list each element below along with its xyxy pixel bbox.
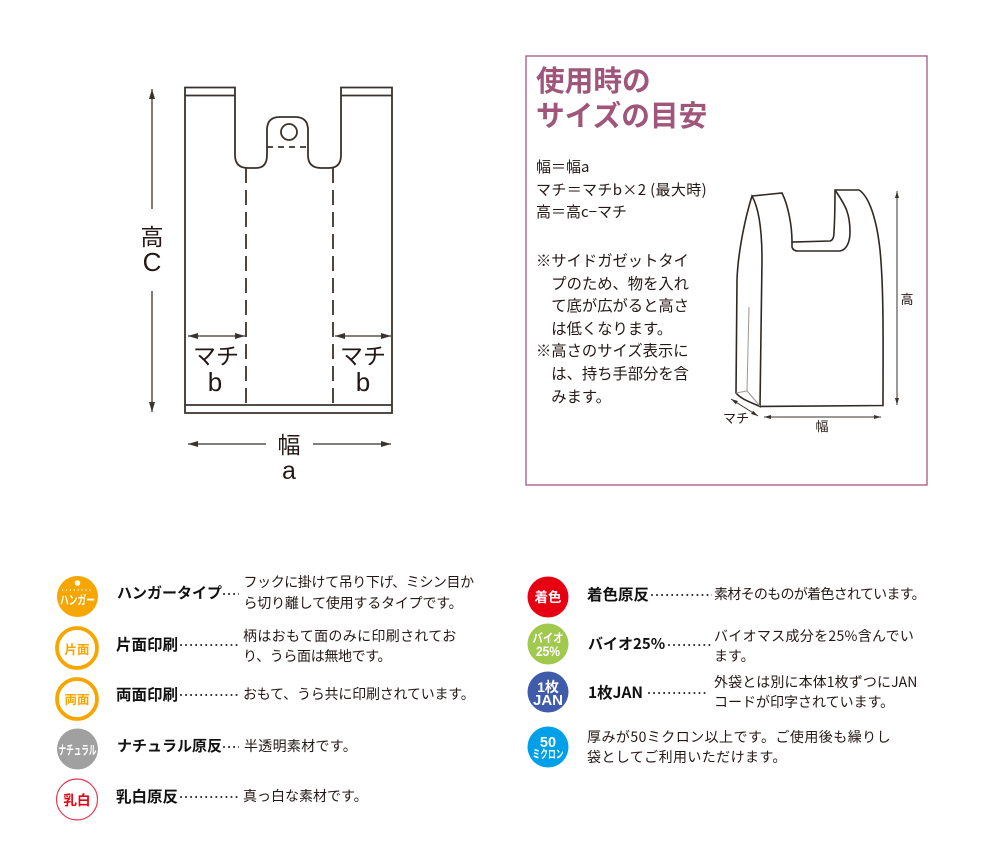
legend: colored	[587, 583, 925, 605]
icon: hanger	[57, 576, 98, 617]
size formula text	[536, 156, 707, 222]
panel title: 使用時の	[536, 59, 651, 100]
legend: single side print	[116, 626, 457, 666]
icon: milky white	[56, 779, 98, 820]
width arrow	[764, 416, 881, 418]
legend: double side print: おもて、うら共に印刷されています。	[243, 684, 475, 704]
icon: natural: ナチュラル	[58, 744, 97, 758]
panel: size guide in use	[536, 59, 707, 407]
gusset label: マチ	[723, 411, 749, 426]
height arrow	[896, 191, 898, 405]
icon: natural	[57, 728, 98, 770]
panel frame	[526, 56, 927, 485]
icon: 1 sheet JAN: JAN	[533, 692, 563, 709]
gusset arrow	[731, 399, 758, 416]
left gusset arrow and label: b	[208, 367, 222, 397]
panel title: サイズの目安	[536, 94, 707, 134]
legend: hanger type: ハンガータイプ	[117, 582, 222, 603]
legend: 1 sheet JAN	[588, 672, 918, 712]
size formula text: 高＝高c−マチ	[536, 201, 627, 222]
gusset fold lines	[736, 307, 760, 406]
icon: 50 micron: ミクロン	[532, 748, 564, 761]
icon: 50 micron: 50	[540, 735, 556, 751]
icon: milky white: 乳白	[64, 792, 90, 808]
icon: double side print: 両面	[64, 693, 90, 707]
icon: 1 sheet JAN: 1枚	[537, 679, 559, 695]
icon: bio 25%	[528, 624, 568, 664]
notes: は、持ち手部分を含	[551, 362, 689, 384]
right gusset arrow and label	[335, 336, 391, 397]
icon: bio 25%: 25%	[536, 644, 560, 659]
legend: colored: 着色原反	[587, 583, 649, 605]
height label: 高	[140, 224, 164, 250]
height label: C	[143, 247, 161, 277]
legend: single side print: 片面印刷	[116, 633, 178, 655]
icon: double side print	[57, 679, 97, 719]
height label	[140, 224, 164, 277]
legend: 1 sheet JAN: 外袋とは別に本体1枚ずつにJAN	[714, 672, 918, 692]
notes	[536, 249, 689, 407]
legend: natural: 半透明素材です。	[244, 736, 357, 756]
right gusset arrow and label: b	[356, 367, 370, 397]
left gusset arrow and label: マチ	[193, 343, 239, 369]
width label: 幅	[815, 419, 829, 434]
notes: ※高さのサイズ表示に	[536, 339, 689, 361]
width arrow and label: 幅	[278, 432, 300, 458]
legend: bio 25%: ます。	[714, 646, 755, 666]
legend: natural: ナチュラル原反	[117, 735, 222, 756]
legend: bio 25%	[588, 626, 914, 666]
flat bag outline	[185, 88, 392, 413]
notes: ※サイドガゼットタイ	[536, 249, 689, 271]
left gusset arrow and label	[188, 336, 245, 397]
legend: milky white	[116, 785, 368, 807]
legend: bio 25%: バイオ25%	[588, 633, 665, 654]
legend: milky white: 真っ白な素材です。	[243, 786, 368, 806]
height arrow	[151, 89, 153, 412]
legend: 1 sheet JAN: コードが印字されています。	[714, 692, 894, 712]
width arrow and label: a	[282, 457, 296, 485]
legend: natural	[117, 735, 357, 756]
icon: hanger: ハンガー	[60, 592, 95, 608]
legend: double side print	[116, 683, 475, 705]
legend: 50 micron text: 厚みが50ミクロン以上です。ご使用後も繰りし	[587, 726, 891, 746]
notes: みます。	[551, 385, 611, 407]
open bag outline	[736, 190, 883, 406]
legend: hanger type	[117, 572, 474, 612]
icon: colored	[528, 576, 568, 618]
legend: bio 25%: バイオマス成分を25%含んでい	[714, 626, 914, 646]
legend: hanger type: ら切り離して使用するタイプです。	[244, 592, 462, 612]
icon: single side print: 片面	[64, 642, 90, 657]
legend: 50 micron text	[587, 726, 891, 767]
size formula text: 幅＝幅a	[536, 156, 589, 177]
icon: 1 sheet JAN	[528, 672, 568, 712]
legend: hanger type: フックに掛けて吊り下げ、ミシン目か	[244, 572, 474, 592]
legend: milky white: 乳白原反	[116, 785, 178, 807]
legend: 1 sheet JAN: 1枚JAN	[588, 681, 643, 703]
height label: 高	[900, 292, 914, 307]
legend: double side print: 両面印刷	[116, 683, 178, 705]
size formula text: マチ＝マチb×2 (最大時)	[536, 178, 707, 200]
notes: プのため、物を入れ	[551, 272, 689, 294]
panel title	[536, 59, 707, 134]
legend: 50 micron text: 袋としてご利用いただけます。	[587, 747, 787, 767]
notes: は低くなります。	[551, 317, 672, 339]
icon: bio 25%: バイオ	[532, 632, 564, 646]
icon: single side print	[57, 628, 97, 668]
right gusset arrow and label: マチ	[340, 343, 386, 369]
icon: colored: 着色	[534, 589, 562, 605]
legend: single side print: 柄はおもて面のみに印刷されてお	[243, 626, 457, 646]
notes: て底が広がると高さ	[551, 294, 689, 316]
legend: single side print: り、うら面は無地です。	[243, 646, 391, 666]
legend: colored: 素材そのものが着色されています。	[714, 584, 925, 604]
icon: 50 micron	[528, 726, 568, 768]
width arrow and label	[188, 432, 391, 485]
